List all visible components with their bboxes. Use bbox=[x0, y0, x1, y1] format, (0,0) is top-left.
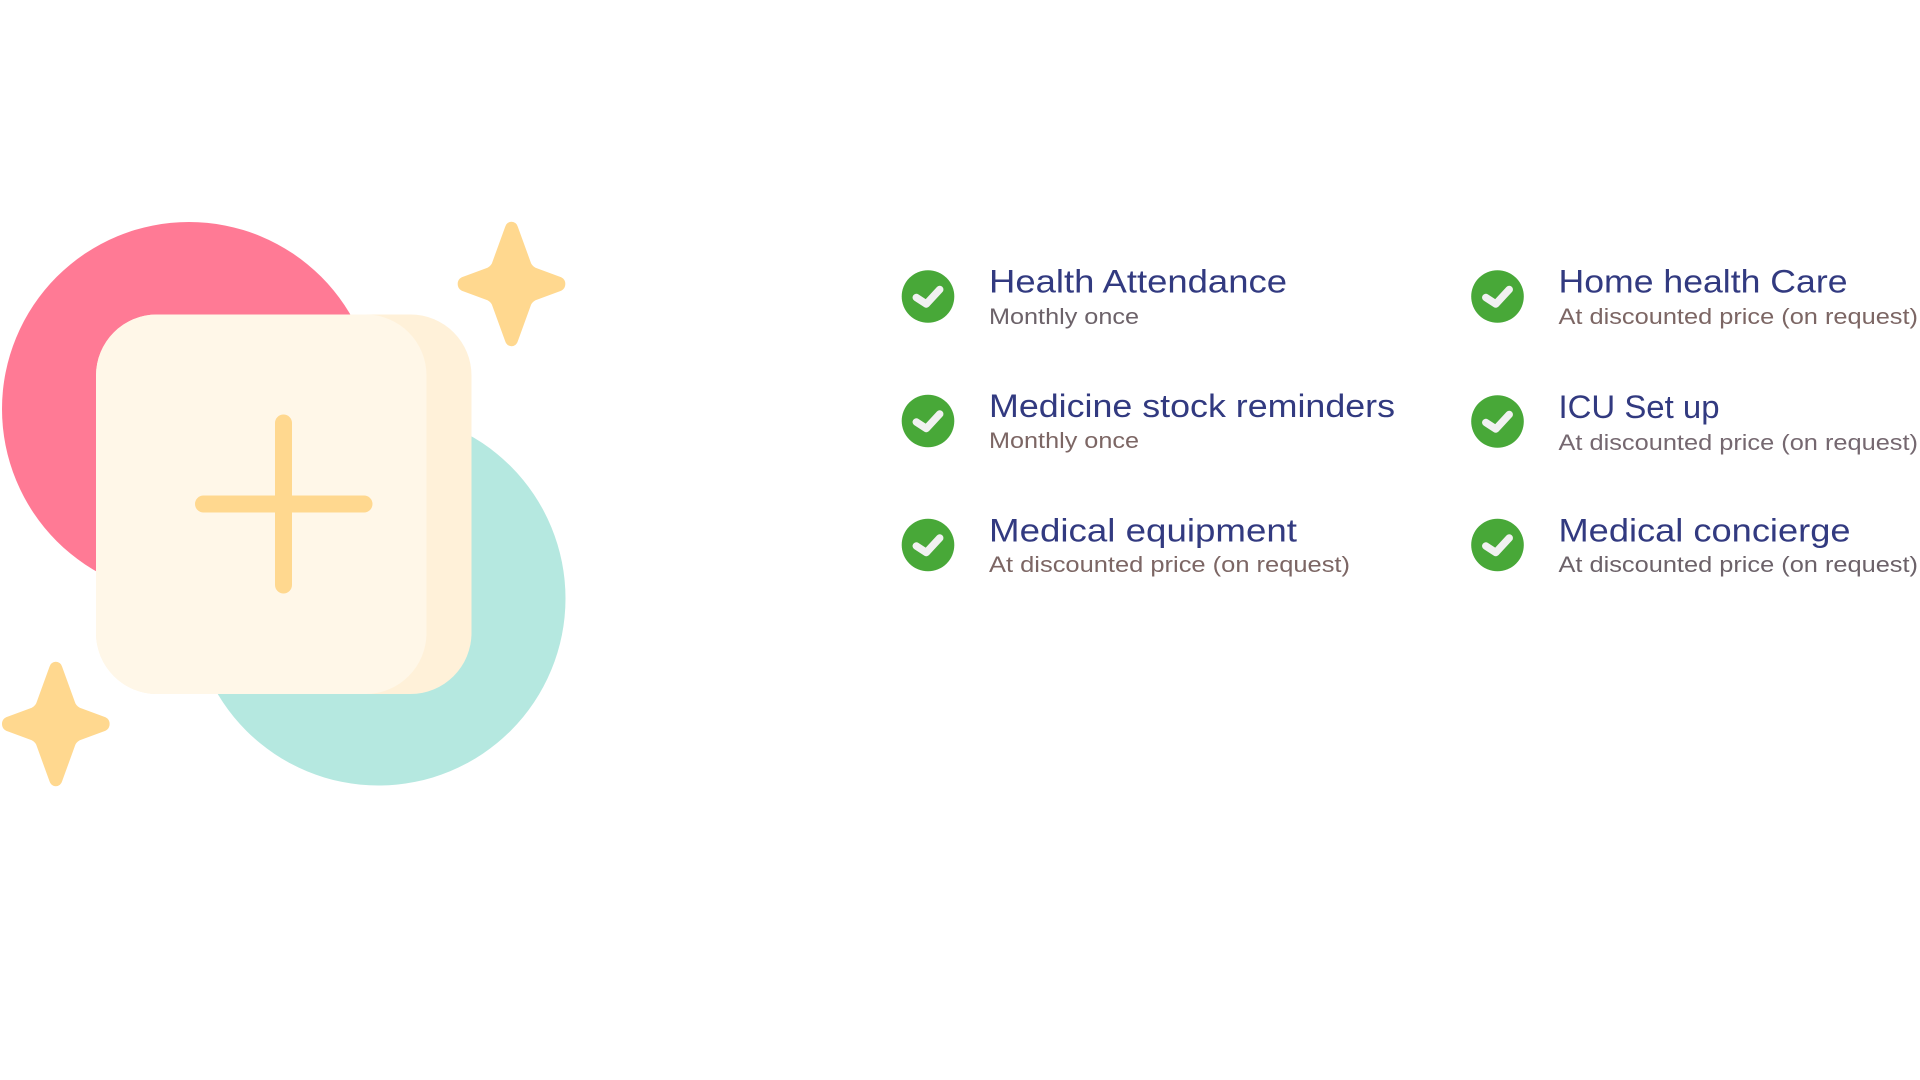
subtext: At discounted price (on request) bbox=[1558, 430, 1918, 455]
pink circle bbox=[2, 222, 376, 596]
feature: Medical concierge bbox=[1471, 512, 1918, 577]
subtext: Monthly once bbox=[989, 304, 1139, 329]
icon: plus sign bbox=[195, 414, 372, 594]
icon: green check bbox=[1471, 395, 1524, 448]
feature: Medicine stock reminders bbox=[902, 388, 1395, 453]
teal circle bbox=[192, 412, 566, 786]
feature: Health Attendance bbox=[902, 264, 1287, 329]
feature: ICU Set up bbox=[1471, 389, 1918, 455]
icon: green check bbox=[1471, 519, 1524, 571]
heading: Medical concierge bbox=[1558, 512, 1850, 548]
icon: green check bbox=[902, 519, 954, 571]
icon: green check bbox=[902, 395, 954, 447]
subtext: At discounted price (on request) bbox=[1558, 552, 1918, 577]
heading: Medicine stock reminders bbox=[989, 388, 1395, 424]
card back layer bbox=[96, 314, 472, 694]
heading: Home health Care bbox=[1558, 264, 1848, 300]
icon: green check bbox=[902, 270, 954, 323]
heading: ICU Set up bbox=[1558, 389, 1720, 425]
subtext: At discounted price (on request) bbox=[989, 552, 1350, 577]
heading: Medical equipment bbox=[989, 512, 1297, 548]
heading: Health Attendance bbox=[989, 264, 1287, 300]
illustration: medical plus card bbox=[2, 222, 565, 786]
feature: Medical equipment bbox=[902, 512, 1350, 577]
subtext: Monthly once bbox=[989, 428, 1139, 453]
card front layer bbox=[96, 314, 426, 694]
icon: green check bbox=[1471, 270, 1524, 323]
subtext: At discounted price (on request) bbox=[1558, 304, 1918, 329]
feature: Home health Care bbox=[1471, 264, 1918, 329]
icon: sparkle bottom left bbox=[2, 662, 110, 786]
icon: sparkle top right bbox=[458, 222, 565, 346]
